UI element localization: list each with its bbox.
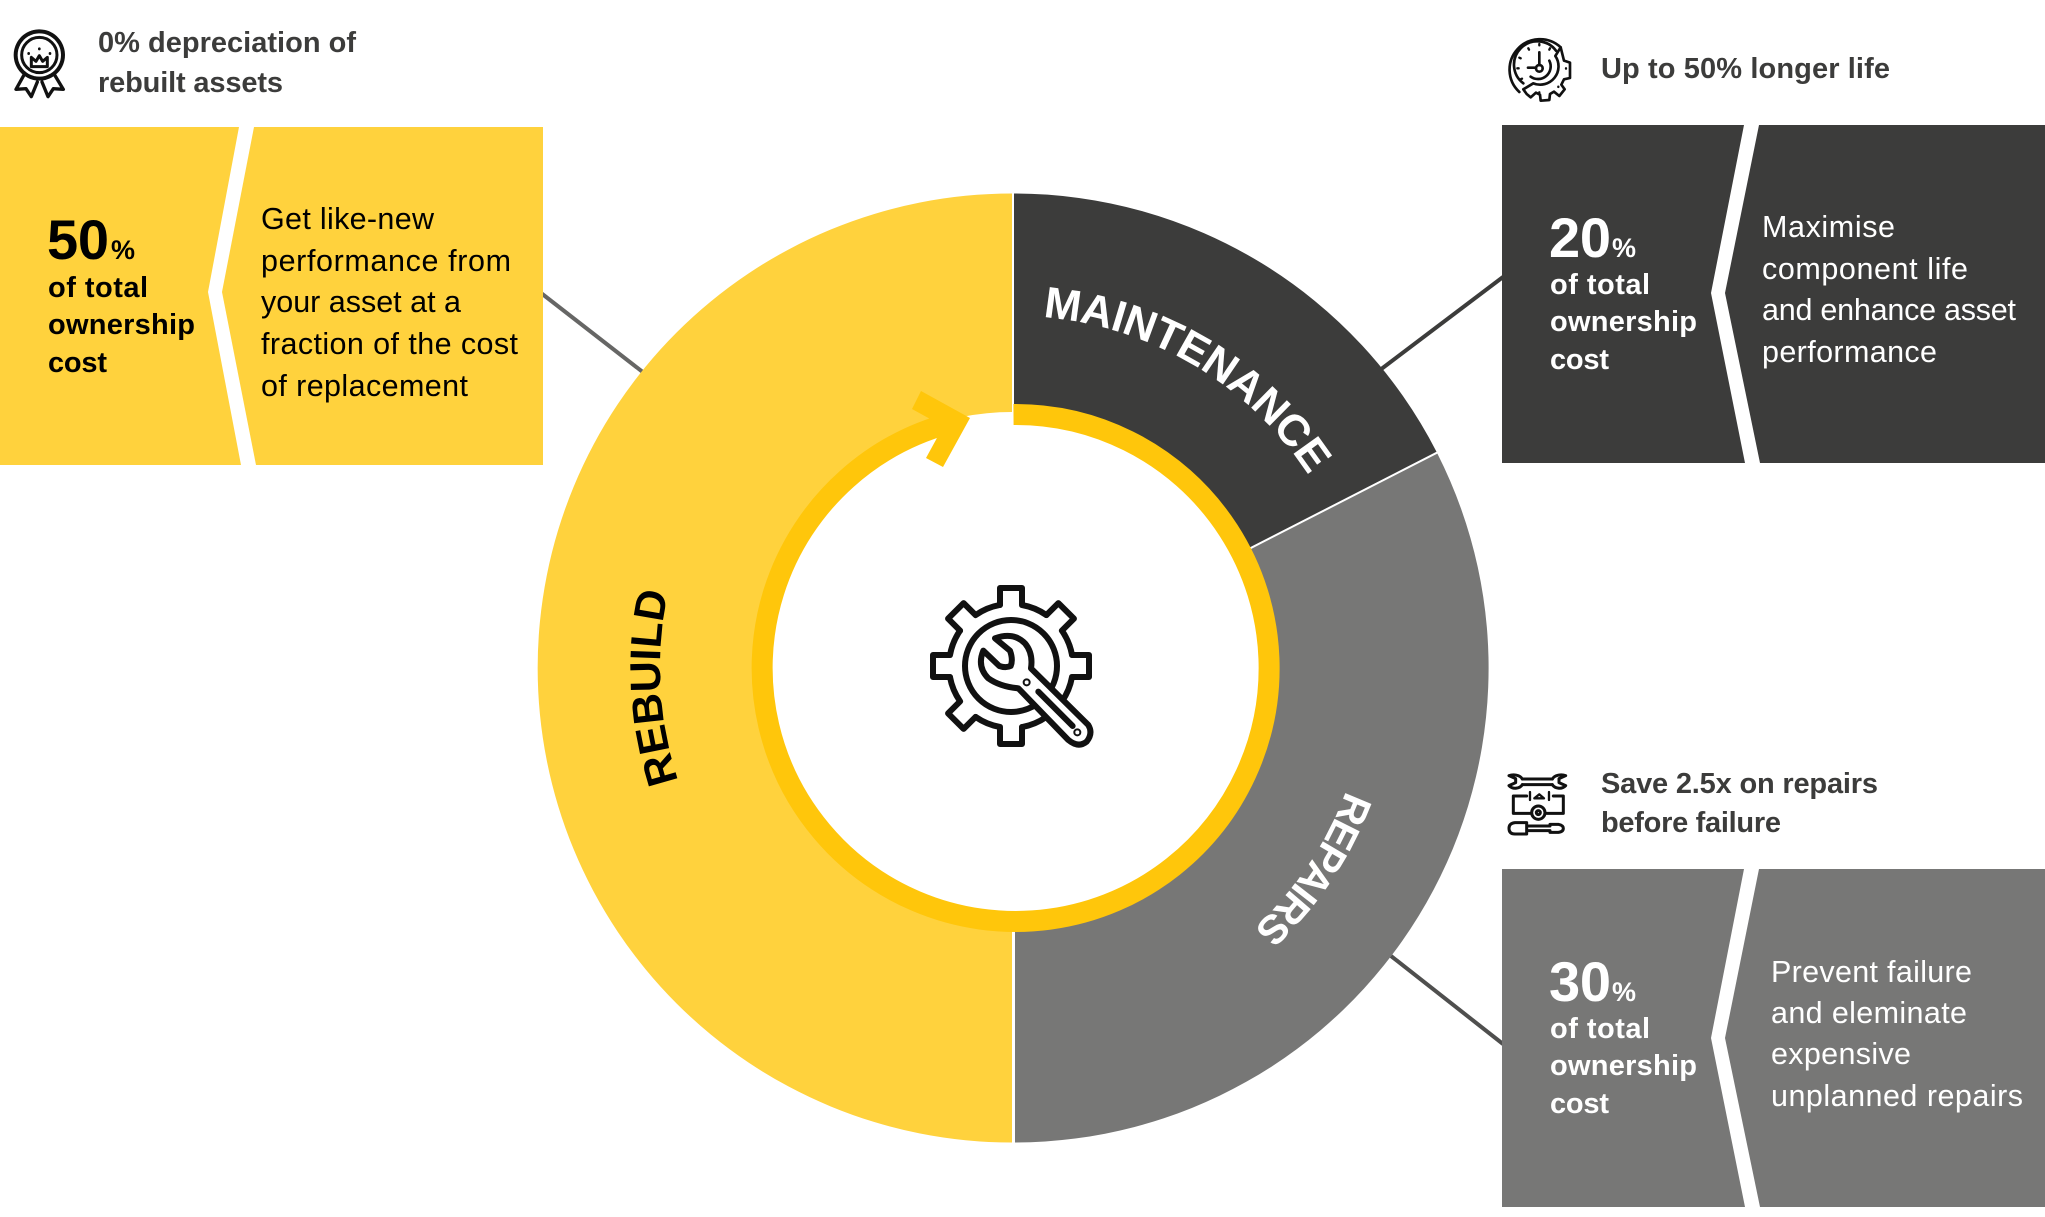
segment: repairs: [1015, 454, 1489, 1143]
stat: 30%: ownership: [1550, 1050, 1697, 1082]
description: maintenance: performance: [1762, 335, 1937, 369]
stat: 30%: of total: [1550, 1013, 1650, 1045]
description: repairs: Prevent failure: [1771, 955, 1972, 989]
cycle arrow ring: [762, 391, 1269, 921]
stat: 20%: 20: [1549, 206, 1611, 269]
icon: clock gear: [1510, 39, 1570, 101]
stat: 50%: 50: [47, 208, 109, 271]
description: rebuild: performance from: [261, 244, 511, 278]
panel: maintenance: [1502, 125, 2045, 463]
heading: longer life: Up to 50% longer life: [1601, 53, 1890, 85]
description: rebuild: of replacement: [261, 369, 469, 403]
description: repairs: and eleminate: [1771, 996, 1967, 1030]
segment: maintenance: [1014, 193, 1436, 551]
label: rebuild: REBUILD: [630, 591, 678, 786]
heading: save on repairs: before failure: [1601, 807, 1781, 839]
description: rebuild: your asset at a: [261, 285, 461, 319]
panel shape: maintenance description: [1725, 125, 2045, 463]
description: maintenance: and enhance asset: [1762, 293, 2017, 327]
panel shape: maintenance stat: [1502, 125, 1745, 463]
stat: 20%: ownership: [1550, 306, 1697, 338]
stat: 50%: cost: [48, 347, 107, 379]
heading: save on repairs: [1601, 768, 1878, 839]
stat: 20%: %: [1612, 233, 1636, 263]
heading: 0% depreciation: 0% depreciation of: [98, 27, 356, 59]
stat: 50%: %: [111, 235, 135, 265]
stat: 20%: [1549, 206, 1697, 376]
panel: rebuild: [0, 127, 543, 465]
icon: central gear and wrench: [931, 586, 1091, 746]
donut chart: [538, 194, 1489, 1142]
heading: save on repairs: Save 2.5x on repairs: [1601, 768, 1878, 800]
stat: 20%: of total: [1550, 269, 1650, 301]
panel shape: rebuild stat: [0, 127, 241, 465]
description: maintenance: [1762, 210, 2017, 369]
description: rebuild: Get like-new: [261, 202, 435, 236]
stat: 50%: of total: [48, 272, 148, 304]
panel shape: repairs description: [1725, 869, 2045, 1207]
panel shape: repairs stat: [1502, 869, 1745, 1207]
stat: 50%: ownership: [48, 309, 195, 341]
leader line: maintenance: [1380, 277, 1503, 370]
description: maintenance: component life: [1762, 252, 1968, 286]
description: rebuild: [261, 202, 519, 403]
stat: 20%: cost: [1550, 344, 1609, 376]
description: repairs: [1771, 955, 2023, 1113]
stat: 30%: cost: [1550, 1088, 1609, 1120]
panel shape: rebuild description: [222, 127, 543, 465]
icon: repair tools: [1509, 775, 1566, 834]
leader line: rebuild: [541, 293, 644, 373]
stat: 30%: %: [1612, 977, 1636, 1007]
description: maintenance: Maximise: [1762, 210, 1895, 244]
stat: 30%: [1549, 950, 1697, 1120]
heading: 0% depreciation: [98, 27, 356, 99]
icon: award rosette with crown: [16, 31, 63, 97]
description: rebuild: fraction of the cost: [261, 327, 519, 361]
panel: repairs: [1502, 869, 2045, 1207]
description: repairs: unplanned repairs: [1771, 1079, 2023, 1113]
heading: 0% depreciation: rebuilt assets: [98, 67, 283, 99]
description: repairs: expensive: [1771, 1037, 1911, 1071]
segment: rebuild: [538, 194, 1012, 1142]
leader line: repairs: [1391, 956, 1503, 1044]
label: repairs: REPAIRS: [1258, 793, 1372, 944]
stat: 50%: [47, 208, 195, 379]
stat: 30%: 30: [1549, 950, 1611, 1013]
label: maintenance: MAINTENANCE: [1046, 287, 1332, 474]
